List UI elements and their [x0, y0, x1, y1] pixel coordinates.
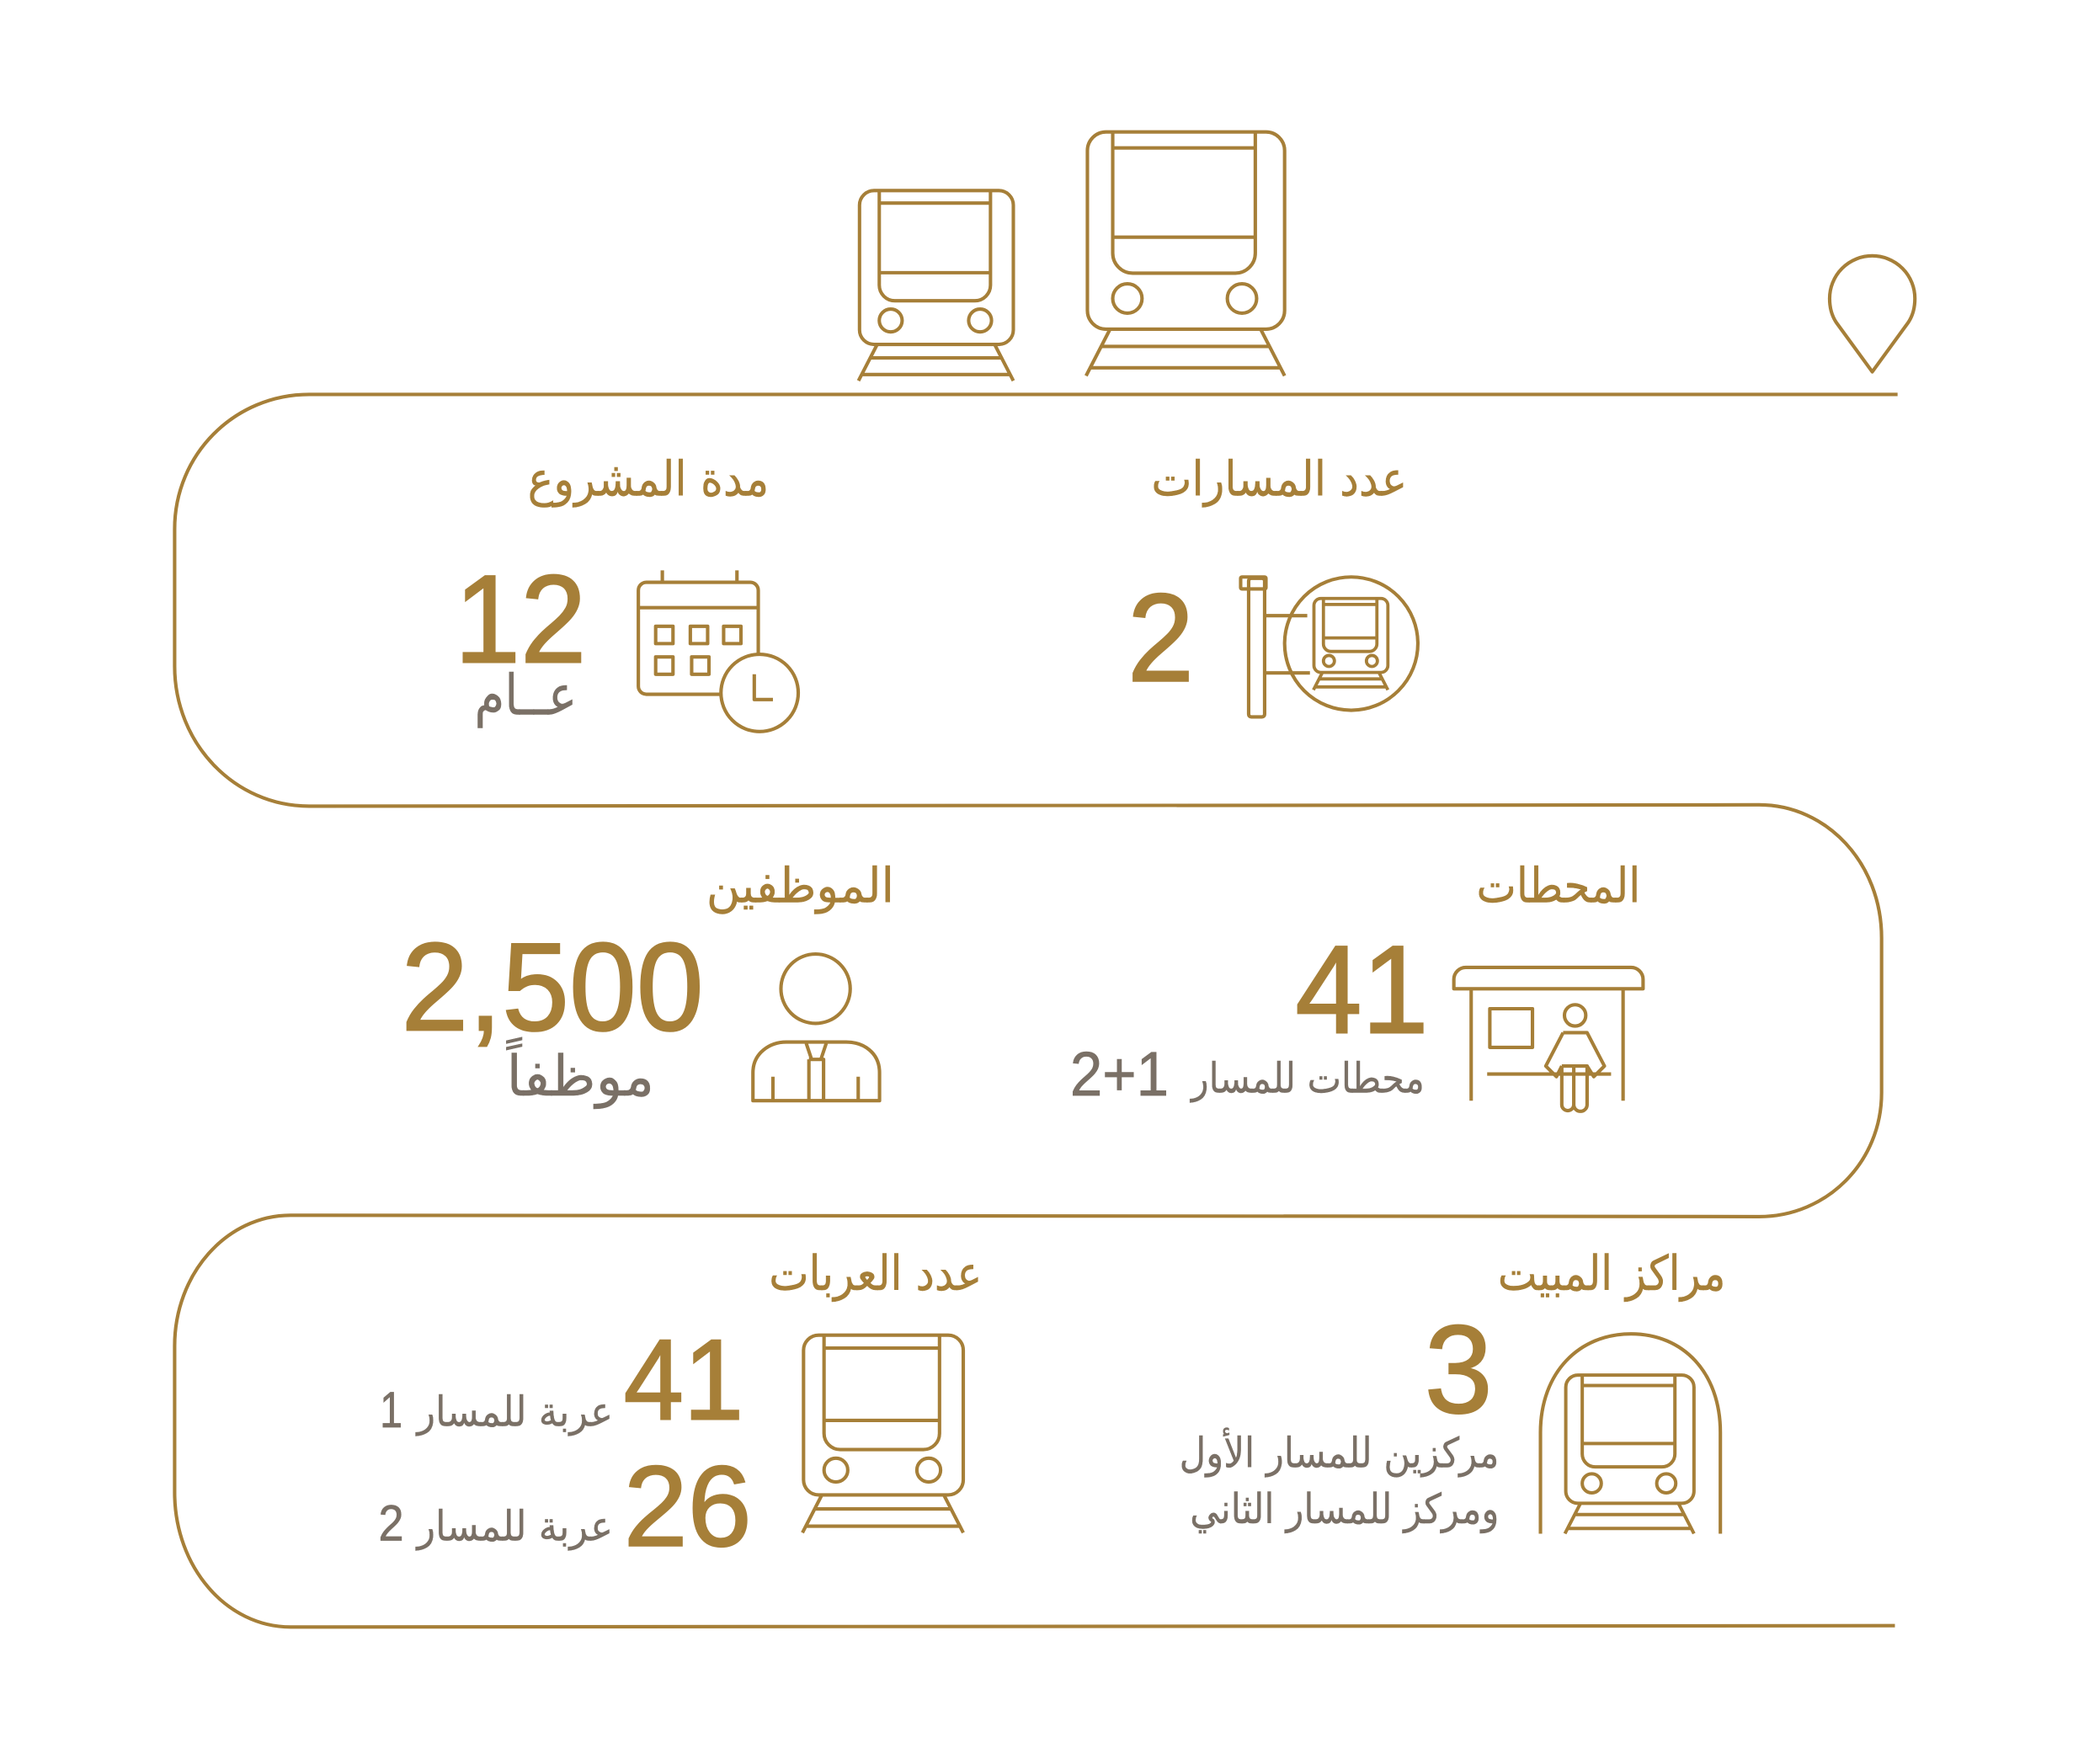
heading: carriages: عدد العربات — [769, 1246, 982, 1302]
label: carriages line 1: عربة للمسار — [415, 1387, 613, 1436]
number: 41 carriages: 41 — [624, 1315, 743, 1443]
icon: large train — [1086, 132, 1285, 376]
block: stations — [1070, 858, 1643, 1111]
icon: station shelter with person — [1454, 967, 1643, 1111]
label: stations per line: محطات للمسار — [1189, 1054, 1425, 1103]
heading: stations: المحطات — [1477, 858, 1640, 914]
number: 3: 3 — [1425, 1299, 1493, 1440]
label: 2: 2 — [379, 1495, 404, 1551]
block: number of lines — [1127, 452, 1418, 717]
icon: small train — [859, 190, 1013, 381]
icon: location pin — [1830, 256, 1915, 372]
text: first line depots: مركزين للمسار الأول — [1180, 1426, 1499, 1477]
number: 2: 2 — [1127, 568, 1194, 708]
label: 1: 1 — [380, 1382, 402, 1438]
heading: number of lines: عدد المسارات — [1151, 452, 1407, 508]
icon: employee — [753, 954, 880, 1101]
icon: station sign with train — [1240, 577, 1418, 717]
icon: carriage train — [802, 1335, 963, 1532]
label: carriages line 2: عربة للمسار — [415, 1501, 613, 1550]
block: carriages — [379, 1246, 982, 1570]
number: 26 carriages: 26 — [624, 1442, 752, 1570]
route line — [174, 394, 1898, 1627]
block: depots — [1180, 1246, 1726, 1534]
number: 12: 12 — [455, 549, 586, 690]
heading: employees: الموظفين — [706, 858, 894, 914]
heading: project duration: مدة المشروع — [528, 452, 769, 508]
number: 2,500: 2,500 — [401, 916, 704, 1057]
text: second line depot: ومركز للمسار الثاني — [1190, 1484, 1499, 1533]
icon: calendar with clock — [638, 570, 798, 732]
number: 41: 41 — [1295, 919, 1429, 1059]
label: 2+1: 2+1 — [1070, 1039, 1169, 1109]
block: employees — [401, 858, 894, 1109]
label: employees unit: موظفاً — [506, 1037, 654, 1109]
icon: train in tunnel — [1541, 1334, 1720, 1534]
label: year: عــام — [474, 662, 577, 727]
block: project duration — [455, 452, 798, 732]
heading: depots: مراكز المبيت — [1498, 1246, 1726, 1302]
